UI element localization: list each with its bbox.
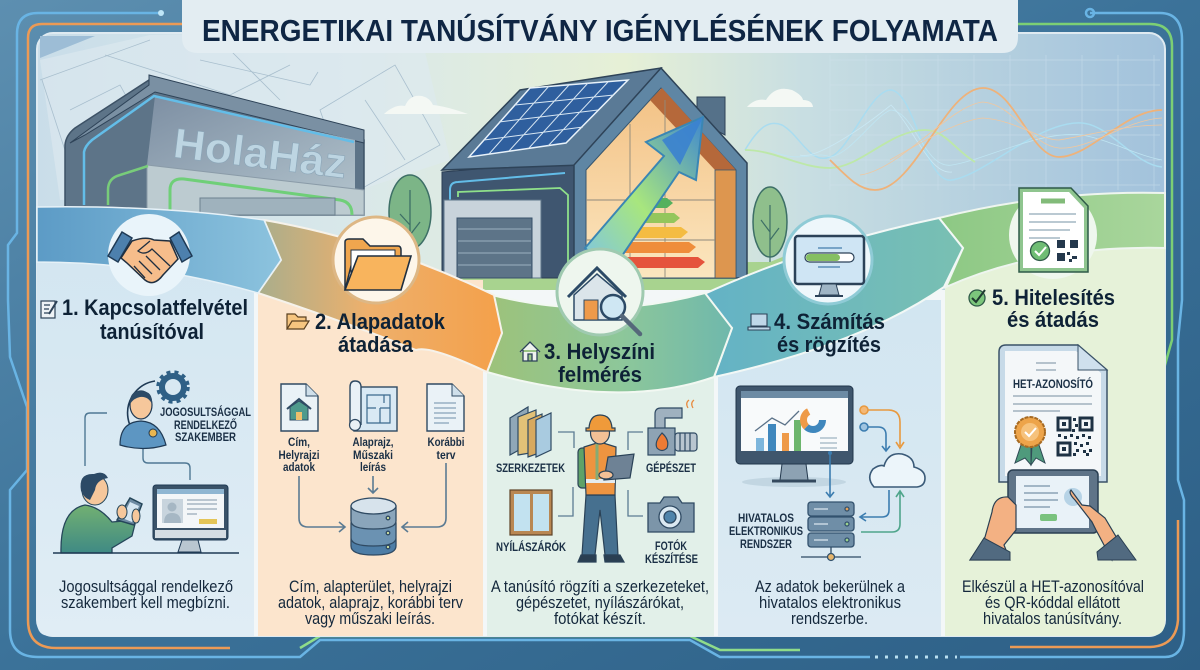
icon: small house	[520, 342, 540, 361]
heading: step 5: és átadás	[1007, 307, 1099, 332]
heading: step 4: és rögzítés	[777, 332, 881, 357]
heading: step 1	[41, 295, 248, 344]
title: ENERGETIKAI TANÚSÍTVÁNY IGÉNYLÉSÉNEK FOLYAMATA	[202, 12, 998, 48]
arrows	[299, 463, 446, 532]
item labels: FOTÓK	[655, 540, 688, 553]
step 2 description: Cím, alapterület, helyrajzi	[289, 577, 452, 596]
cloud	[870, 454, 925, 487]
step 2 illustration	[278, 381, 464, 555]
energy waves	[745, 88, 1162, 190]
step 4 description: hivatalos elektronikus	[759, 593, 901, 612]
certificate document	[999, 345, 1107, 482]
item labels: NYÍLÁSZÁRÓK	[496, 541, 567, 554]
specialist label: JOGOSULTSÁGGAL	[160, 406, 251, 419]
doc labels: Cím,	[288, 437, 310, 449]
step 5 icon: certificate	[1009, 188, 1097, 279]
rising arrow	[585, 117, 703, 272]
heading: step 5: 5. Hitelesítés	[992, 285, 1115, 310]
system label: ELEKTRONIKUS	[729, 526, 803, 538]
step 3 illustration	[496, 400, 698, 566]
step 5 description	[962, 577, 1144, 628]
ribbon: step 4	[700, 218, 963, 377]
step 2 description: vagy műszaki leírás.	[305, 609, 435, 628]
step 5 description: Elkészül a HET-azonosítóval	[962, 577, 1144, 596]
ribbon: step 2	[258, 220, 502, 372]
item labels	[496, 462, 698, 566]
gear	[158, 372, 188, 402]
left hand	[970, 497, 1016, 560]
item labels: SZERKEZETEK	[496, 463, 566, 475]
column panels	[37, 240, 1165, 636]
heading: step 2: 2. Alapadatok	[315, 309, 446, 334]
step 4 panel	[718, 300, 941, 636]
doc labels: Műszaki	[353, 450, 393, 462]
heading: step 5	[969, 285, 1115, 332]
server	[801, 502, 861, 560]
heading: step 3	[520, 339, 655, 387]
blueprint lines	[40, 30, 450, 200]
step 5 illustration	[970, 345, 1136, 560]
doc: previous plan	[427, 384, 464, 431]
step 1 illustration	[53, 372, 251, 553]
building: HolaHáz	[65, 75, 364, 215]
system label: HIVATALOS	[738, 513, 794, 525]
heading: step 1: 1. Kapcsolatfelvétel	[62, 295, 248, 320]
step 5 panel	[945, 240, 1165, 636]
doc: floor plan	[350, 381, 397, 431]
tree left	[389, 175, 431, 258]
step 4 icon: monitor with progress	[784, 216, 872, 304]
step 1 description: szakembert kell megbízni.	[61, 593, 230, 612]
step 3 description: A tanúsító rögzíti a szerkezeteket,	[491, 577, 709, 596]
house with solar panels	[380, 68, 800, 290]
energy bars	[623, 198, 705, 268]
heading: step 3: 3. Helyszíni	[544, 339, 655, 364]
heading: step 2: átadása	[338, 332, 414, 357]
doc labels: Alaprajz,	[352, 437, 394, 449]
gable	[574, 68, 747, 278]
heading: step 1: tanúsítóval	[100, 319, 204, 344]
seal	[1015, 417, 1045, 465]
heading: step 2	[287, 309, 446, 357]
doc labels: terv	[436, 450, 456, 462]
doc labels: Korábbi	[428, 437, 464, 449]
icon: small folder	[287, 314, 309, 329]
doc labels	[278, 437, 464, 474]
step 2 description	[278, 577, 463, 628]
item labels: KÉSZÍTÉSE	[645, 553, 698, 566]
step 1 description: Jogosultsággal rendelkező	[59, 577, 233, 596]
certificate id: HET-AZONOSÍTÓ	[1013, 378, 1093, 391]
step 1 panel	[37, 250, 254, 636]
heading: step 4	[748, 309, 885, 357]
tree right	[753, 187, 787, 262]
heading: step 4: 4. Számítás	[774, 309, 885, 334]
tablet	[1008, 470, 1098, 533]
client with phone	[61, 473, 142, 553]
step 4 description: rendszerbe.	[791, 609, 868, 628]
window	[510, 490, 552, 535]
step 3 icon: house and magnifier	[557, 249, 643, 335]
garage	[444, 200, 541, 278]
doc labels: leírás	[360, 462, 386, 474]
ribbon: step 3	[487, 293, 732, 392]
step 3 panel	[487, 360, 714, 636]
desktop monitor	[53, 485, 239, 553]
heading: step 3: felmérés	[558, 362, 642, 387]
icon: notepad	[41, 301, 57, 318]
step 3 description: fotókat készít.	[554, 609, 646, 628]
heating	[648, 400, 697, 455]
specialist label	[160, 406, 251, 444]
clouds	[384, 89, 813, 114]
dashboard monitor	[736, 386, 853, 487]
qr code	[1058, 418, 1092, 456]
specialist label: SZAKEMBER	[175, 432, 237, 444]
step 1 description	[59, 577, 233, 612]
chimney	[697, 97, 725, 135]
specialist label: RENDELKEZŐ	[174, 419, 237, 432]
camera	[648, 497, 694, 532]
data flow arrows	[826, 406, 904, 532]
step 3 description: gépészetet, nyílászárókat,	[516, 593, 684, 612]
books: structures	[510, 407, 551, 457]
sign text: HolaHáz	[171, 119, 349, 187]
title	[182, 0, 1018, 53]
worker	[578, 415, 634, 562]
ribbon: step 5	[939, 193, 1165, 287]
doc labels: adatok	[283, 462, 316, 474]
step 2 description: adatok, alaprajz, korábbi terv	[278, 593, 463, 612]
step 4 description: Az adatok bekerülnek a	[755, 577, 905, 596]
step 3 description	[491, 577, 709, 628]
doc: address	[281, 384, 318, 431]
ribbon: step 1	[37, 207, 281, 293]
wave grid	[830, 55, 1160, 190]
step 4 illustration	[729, 386, 925, 560]
step 5 description: hivatalos tanúsítvány.	[983, 609, 1122, 628]
step 5 description: és QR-kóddal ellátott	[985, 593, 1120, 612]
step 2 panel	[258, 280, 483, 636]
solar panel	[469, 80, 628, 157]
doc labels: Helyrajzi	[278, 450, 320, 462]
step 4 description	[755, 577, 905, 628]
right hand	[1070, 490, 1118, 560]
specialist avatar	[120, 381, 166, 448]
panel gaps	[254, 290, 945, 636]
icon: check	[969, 290, 985, 306]
item labels: GÉPÉSZET	[646, 462, 696, 475]
system label	[729, 513, 803, 551]
step 2 icon: folder	[333, 217, 419, 303]
system label: RENDSZER	[740, 539, 793, 551]
step 1 icon: handshake	[108, 214, 192, 296]
database	[351, 498, 396, 555]
neon lines	[450, 173, 565, 240]
icon: laptop	[748, 314, 770, 330]
